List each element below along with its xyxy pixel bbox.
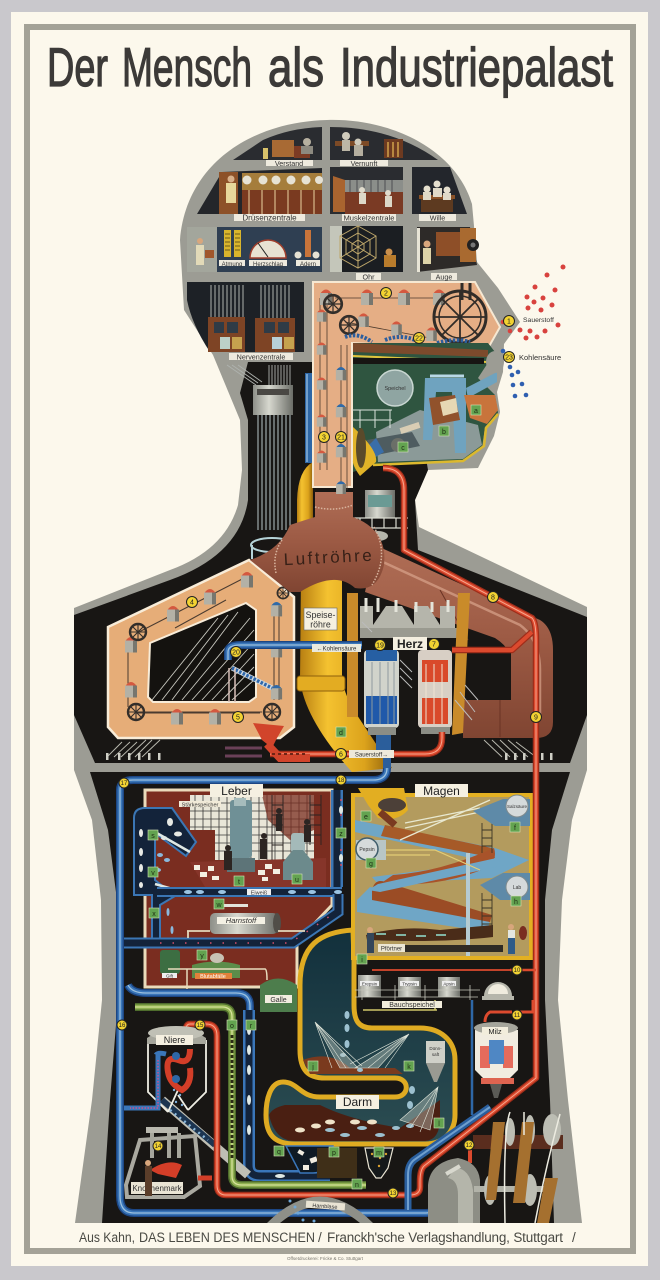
label: Sauerstoff: Sauerstoff <box>523 317 554 324</box>
right lung copper pipe <box>365 545 553 738</box>
room labels: Drüsenzentrale <box>242 214 297 222</box>
number markers: 14 <box>155 1144 162 1150</box>
gall tank: Galle: Galle <box>270 997 287 1004</box>
protein conveyor: Eiweiß <box>251 890 268 896</box>
label: Magen: Magen <box>423 784 460 798</box>
room labels: Ohr <box>363 272 375 282</box>
hopper m <box>365 1148 393 1178</box>
label: Darm <box>336 1095 379 1109</box>
label: Speiseröhre: Speise- <box>306 610 335 620</box>
letter markers: j <box>311 1064 314 1071</box>
machine g: Pepsin <box>359 847 375 853</box>
diagonal waste conveyor <box>120 894 338 943</box>
letter markers: y <box>200 953 204 960</box>
footer credit: Aus Kahn, <box>79 1230 135 1245</box>
intestine: Darm <box>266 930 455 1144</box>
press frame <box>423 378 466 453</box>
letter markers: i <box>361 957 363 964</box>
lower diagonal chute from kidney <box>162 1100 248 1175</box>
lung capillary conveyor <box>229 668 272 702</box>
label: Speiseröhre <box>304 608 337 630</box>
number markers <box>117 288 542 1198</box>
title: Mensch <box>122 36 252 98</box>
room: Nervenzentrale <box>187 282 304 352</box>
stomach room: Magen <box>353 784 531 958</box>
room labels: Herzschlag <box>253 262 283 268</box>
red ventricle <box>418 650 452 734</box>
bone marrow: Knochenmark <box>126 1127 212 1197</box>
bladder: Harnblase <box>267 1196 373 1223</box>
label: Magen <box>415 784 468 798</box>
liver room: Leber <box>120 784 343 1012</box>
nose and lung space in head <box>313 282 500 494</box>
number markers: 18 <box>338 778 345 784</box>
gift and blood waste: Blutabfälle <box>200 974 226 980</box>
room labels: Muskelzentrale <box>343 214 395 222</box>
letter markers: u <box>295 877 299 884</box>
number markers: 9 <box>534 714 538 722</box>
number markers: 21 <box>337 434 345 442</box>
axle <box>474 1186 550 1192</box>
machine f <box>473 795 530 826</box>
press machine <box>227 798 255 872</box>
protein conveyor <box>157 889 342 896</box>
room labels: Adern <box>300 262 316 268</box>
label: Luftröhre: Luftröhre <box>283 546 372 569</box>
red oxygen funnel <box>225 723 310 758</box>
label: Darm: Darm <box>343 1095 372 1109</box>
workers <box>224 808 311 870</box>
room labels: Verstand <box>275 159 303 168</box>
letter markers: l <box>438 1121 440 1128</box>
number markers: 7 <box>432 642 436 648</box>
letter markers: n <box>355 1182 359 1189</box>
title <box>47 36 613 98</box>
trachea: Luftröhre <box>250 492 384 592</box>
kidney: Niere: Niere <box>164 1035 185 1045</box>
column under intestine <box>317 1148 357 1178</box>
label: Herz: Herz <box>397 637 423 651</box>
mouth machine room: Speichel <box>384 386 406 392</box>
red artery pipes <box>186 468 536 1195</box>
heart pump <box>347 593 478 752</box>
room: Muskelzentrale <box>330 167 403 214</box>
stomach slide 1 <box>355 820 529 884</box>
belt wheels <box>128 587 289 720</box>
spray l <box>400 1087 438 1132</box>
blue heart pipe: Kohlensäure <box>228 644 387 768</box>
label: Starkespeicher: Stärkespeicher <box>182 802 219 808</box>
room: Drüsenzentrale <box>197 168 323 214</box>
letter markers: m <box>376 1150 382 1157</box>
room: Verstand <box>233 127 322 160</box>
torso interior: chest <box>74 362 587 763</box>
gastric nozzle: saft <box>432 1052 440 1057</box>
pancreas: Bauchspeichel: Trypsin <box>402 982 417 986</box>
white cords <box>505 1112 560 1223</box>
body silhouette <box>74 120 587 1223</box>
title: Der <box>47 36 108 98</box>
number markers: 11 <box>514 1013 521 1019</box>
hatching near diaphragm <box>107 740 536 757</box>
number markers: 17 <box>121 781 128 787</box>
letter markers: b <box>442 429 446 436</box>
heart belts <box>347 593 358 717</box>
number markers: 16 <box>119 1023 126 1029</box>
number markers: 23 <box>505 354 513 362</box>
urea tank: Harnstoff <box>187 904 305 938</box>
number markers: 5 <box>236 714 240 722</box>
gall tank: Galle <box>260 978 297 1012</box>
blue ventricle <box>364 650 399 752</box>
wheels in nose <box>324 295 342 313</box>
room labels: Atmung <box>222 262 242 268</box>
letter markers: a <box>474 408 478 415</box>
room: Vernunft <box>330 127 438 160</box>
tank in neck <box>354 490 408 541</box>
label: Leber <box>210 784 263 798</box>
blue heart pipe: Kohlensäure: ←Kohlensäure <box>317 646 357 652</box>
room labels: Nervenzentrale <box>237 352 285 362</box>
liver floor <box>190 858 326 887</box>
number markers: 4 <box>190 600 194 606</box>
head rooms <box>187 127 479 362</box>
oxygen particles: red dots <box>501 264 566 340</box>
letter markers: r <box>250 1023 253 1030</box>
column <box>466 853 470 956</box>
letter markers: e <box>364 814 368 821</box>
statue machine <box>283 833 313 880</box>
letter markers: d <box>339 730 343 737</box>
torso interior: abdomen <box>90 772 570 1223</box>
bone marrow: Knochenmark: Knochenmark <box>132 1184 183 1193</box>
pancreas: Bauchspeichel: Bauchspeichel <box>389 1002 435 1009</box>
pancreas: Bauchspeichel: Apsin <box>443 982 455 986</box>
brown hopper <box>429 395 460 425</box>
heart pistons <box>360 598 462 638</box>
food lumps in bowel <box>269 1100 440 1141</box>
title: als <box>268 36 324 98</box>
number markers: 8 <box>491 594 495 602</box>
room labels: Vernunft <box>351 159 377 168</box>
letter markers: f <box>514 825 516 832</box>
bowl p q <box>286 1146 333 1173</box>
label: Sauerstoff arrow <box>349 750 394 758</box>
footer credit: / <box>318 1230 322 1245</box>
gift and blood waste: Gift <box>166 974 174 978</box>
stomach workers <box>367 924 527 954</box>
gastric nozzle <box>426 1041 445 1082</box>
number markers: 2 <box>384 290 388 298</box>
room: Auge <box>417 227 479 272</box>
gastric nozzle: Dünn- <box>429 1046 442 1051</box>
room labels: Wille <box>430 214 445 222</box>
hatching behind heart <box>362 622 478 720</box>
motor housing <box>428 1158 480 1223</box>
blue and red neck pipes <box>305 373 366 463</box>
gastric juice jets <box>400 800 490 840</box>
gift and blood waste <box>160 950 267 990</box>
letter markers: x <box>152 911 156 918</box>
letter markers: o <box>230 1023 234 1030</box>
letter markers: q <box>277 1149 281 1156</box>
saliva tank <box>377 370 413 406</box>
number markers: 12 <box>466 1143 473 1149</box>
vertical vein conveyor <box>337 790 343 887</box>
room: Ohr <box>330 226 403 272</box>
footer credit: / <box>572 1230 576 1245</box>
machine f: Salzsäure <box>507 804 528 809</box>
footer credit: Franckh'sche Verlagshandlung, Stuttgart <box>327 1230 563 1245</box>
machine g <box>356 838 386 860</box>
label: Kohlensäure: Kohlensäure <box>519 353 561 362</box>
footer credit <box>79 1230 576 1245</box>
stomach slide 2 <box>357 887 490 932</box>
tile wall <box>190 795 314 860</box>
room: Wille <box>412 167 467 214</box>
label: Pförtner: Pförtner <box>381 946 402 952</box>
teeth rollers <box>367 432 420 456</box>
letter markers: s <box>151 833 155 840</box>
starch channel <box>134 808 196 945</box>
motor and belts machine <box>428 1112 563 1223</box>
ladders <box>272 795 321 860</box>
machine h: Lab <box>513 885 521 891</box>
room: Atmung and Herzschlag <box>187 227 322 272</box>
letter markers <box>148 405 521 1189</box>
number markers: 20 <box>232 650 240 656</box>
belts <box>486 1122 505 1200</box>
ladder right upper <box>482 823 492 930</box>
letter markers: h <box>514 899 518 906</box>
nerve endings <box>106 753 552 760</box>
yellow trumpet <box>353 427 376 476</box>
wheels <box>484 1114 561 1206</box>
label: Pförtner <box>378 944 405 952</box>
portal vein conveyor <box>247 1010 330 1178</box>
green pipe <box>135 1007 366 1185</box>
number markers: 19 <box>376 642 384 650</box>
number markers: 3 <box>322 434 326 442</box>
printer note: Offsetdruckerei: Fricke & Co. Stuttgart <box>287 1256 364 1261</box>
sugar blocks <box>194 864 280 881</box>
label: Starkespeicher <box>179 801 221 808</box>
trachea lift cables <box>320 298 440 490</box>
room labels: Auge <box>436 272 452 282</box>
blue pipe network <box>120 758 437 1213</box>
neck lift with nerve cables <box>227 365 293 559</box>
lung conveyor belt <box>128 575 279 713</box>
stomach food trough 1 <box>381 825 495 858</box>
big flywheel <box>434 283 486 343</box>
number markers: 15 <box>197 1023 204 1029</box>
label: Sauerstoff arrow: Sauerstoff→ <box>355 752 388 758</box>
letter markers: c <box>401 445 405 452</box>
left lung <box>108 560 294 738</box>
letter markers: t <box>238 879 240 886</box>
machine h <box>480 873 530 900</box>
mouth machine room <box>352 343 504 476</box>
stomach food belt <box>366 925 493 941</box>
bladder: Harnblase: Harnblase <box>312 1203 338 1211</box>
pancreas: Bauchspeichel: Erepsin <box>362 982 378 986</box>
letter markers: g <box>369 861 373 868</box>
carbon dioxide particles: blue dots <box>501 349 528 398</box>
esophagus: Speiseröhre <box>297 462 392 772</box>
number markers: 1 <box>507 318 511 326</box>
floor <box>405 945 503 952</box>
letter markers: k <box>407 1064 411 1071</box>
funnel into stomach <box>358 788 408 825</box>
number markers: 22 <box>415 336 423 342</box>
spray k <box>350 1034 409 1068</box>
spray j <box>315 1022 362 1068</box>
label: Leber: Leber <box>221 784 252 798</box>
label: Speiseröhre: röhre <box>310 620 331 630</box>
beam <box>473 1135 563 1149</box>
blue vein to spleen <box>408 1000 490 1210</box>
letter markers: v <box>151 870 155 877</box>
letter markers: p <box>332 1150 336 1157</box>
letter markers: z <box>339 831 343 838</box>
lips <box>464 395 498 424</box>
pancreas: Bauchspeichel <box>355 970 514 1010</box>
number markers: 13 <box>390 1191 397 1197</box>
spleen: Milz <box>474 1022 518 1098</box>
room labels <box>219 159 457 362</box>
urea tank: Harnstoff: Harnstoff <box>226 916 257 925</box>
nose bulb <box>486 351 504 373</box>
number markers: 6 <box>339 752 343 758</box>
kidney: Niere <box>124 1026 206 1112</box>
spleen: Milz: Milz <box>488 1027 502 1036</box>
letter markers: w <box>215 902 222 909</box>
number markers: 10 <box>514 968 521 974</box>
lung window with nerve lines <box>148 603 256 702</box>
railing <box>352 410 392 428</box>
footer credit: DAS LEBEN DES MENSCHEN <box>139 1230 315 1245</box>
blue bubble conveyor <box>345 335 470 343</box>
